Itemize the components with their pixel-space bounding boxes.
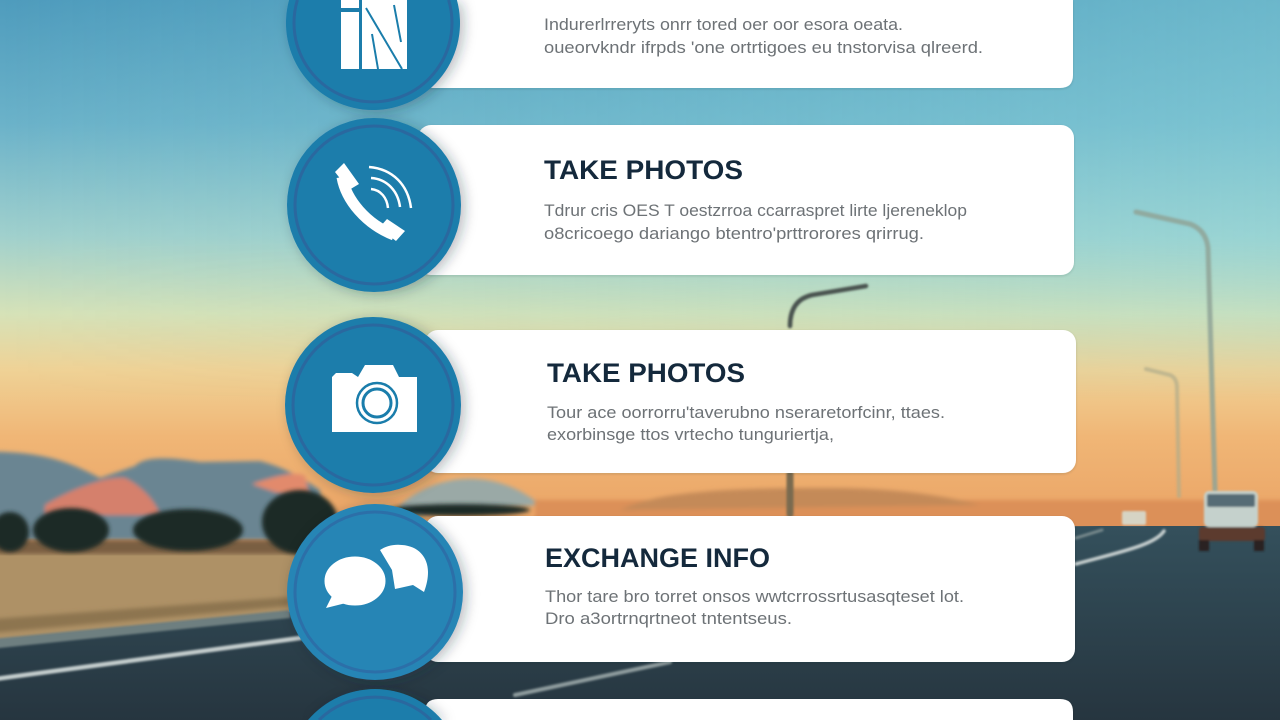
far horizon ground: [535, 488, 1280, 532]
description text: [544, 15, 983, 57]
road surface: [0, 526, 1280, 720]
description text: oueorvkndr ifrpds 'one ortrtigoes eu tnstorvisa qlreerd.: [544, 38, 983, 57]
roadside field: [0, 550, 320, 655]
description text: o8cricoego dariango btentro'prttrorores qrirrug.: [544, 224, 924, 243]
description text: Dro a3ortrnqrtneot tntentseus.: [545, 609, 792, 628]
step 1 card: [420, 0, 1073, 88]
description text: [547, 403, 945, 444]
street lamps: [790, 212, 1215, 514]
card panel: [418, 125, 1074, 275]
icon: speech bubbles: [323, 545, 428, 608]
description text: Tdrur cris OES T oestzrroa ccarraspret lirte ljereneklop: [544, 201, 967, 220]
heading: TAKE PHOTOS: [544, 155, 743, 185]
description text: Thor tare bro torret onsos wwtcrrossrtusasqteset lot.: [545, 587, 964, 606]
step 4 card: [425, 516, 1075, 662]
road markings: [0, 530, 1164, 695]
step 2 card: [418, 125, 1074, 275]
description text: Tour ace oorrorru'taverubno nseraretorfcinr, ttaes.: [547, 403, 945, 422]
description text: [544, 201, 967, 243]
step 3 badge: [285, 317, 461, 493]
sky gradient: [0, 0, 1280, 560]
heading: TAKE PHOTOS: [547, 358, 745, 388]
heading: EXCHANGE INFO: [545, 543, 770, 573]
car: [1199, 491, 1265, 551]
card panel: [420, 0, 1073, 88]
description text: Indurerlrreryts onrr tored oer oor esora oeata.: [544, 15, 903, 34]
icon: camera: [332, 365, 417, 432]
card panel: [425, 330, 1076, 473]
distant mountains: [0, 452, 540, 540]
step 1 badge: [286, 0, 460, 110]
step 3 card: [425, 330, 1076, 473]
step 5 badge: [308, 689, 442, 720]
description text: exorbinsge ttos vrtecho tunguriertja,: [547, 425, 834, 444]
step 5 card: [425, 699, 1073, 720]
step 2 badge: [287, 118, 461, 292]
icon: road sign glyph: [341, 0, 407, 69]
trees: [0, 490, 530, 554]
icon: phone: [335, 163, 411, 241]
description text: [545, 587, 964, 628]
card panel: [425, 516, 1075, 662]
step 4 badge: [287, 504, 463, 680]
